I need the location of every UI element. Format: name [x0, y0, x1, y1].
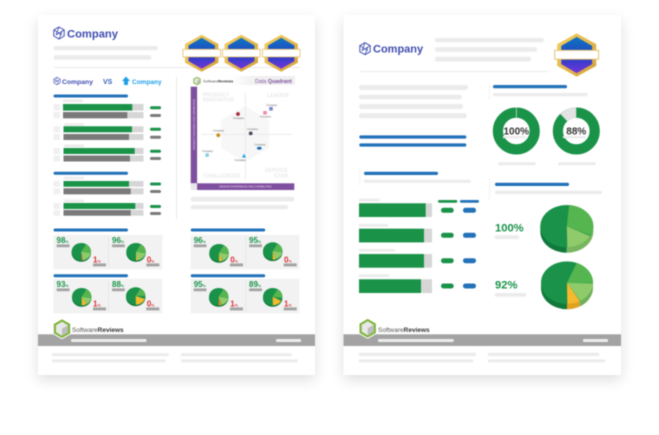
quadrant vendor points: Company [233, 116, 245, 120]
quadrant labels: PRODUCT [203, 92, 230, 98]
quadrant labels: STAR [274, 174, 288, 180]
quadrant vendor points: Company [234, 158, 246, 162]
card 98%: 98% [56, 236, 69, 245]
quadrant vendor points: Company [254, 142, 266, 146]
card 95% [249, 236, 297, 266]
section heading: pies [489, 178, 602, 200]
right footer lines [359, 353, 605, 362]
card 88%: 0% [147, 299, 155, 308]
versus heading: VS [103, 79, 113, 86]
blue link lines [359, 135, 466, 147]
pie chart 92% [541, 261, 593, 309]
quadrant vendor points: Company [260, 114, 272, 118]
header text lines [360, 38, 548, 72]
left footer band [38, 334, 315, 346]
card 98%: 1% [93, 255, 101, 264]
card 96%: 96% [112, 236, 125, 245]
card 95%: 0% [284, 255, 292, 264]
pie chart 100% [540, 205, 593, 253]
versus heading [54, 76, 162, 86]
card 95%: 95% [249, 236, 262, 245]
quadrant labels [203, 92, 289, 180]
card 98% [56, 236, 106, 266]
quadrant labels: LEADER [267, 93, 289, 99]
intro text lines [359, 85, 468, 118]
SoftwareReviews logo left [53, 319, 124, 339]
quadrant vendor points: Company [202, 149, 214, 153]
card 89%: 1% [284, 299, 292, 308]
stat 100%: 100% [495, 223, 524, 235]
quadrant axes: PRODUCT FEATURES AND CAPABILITIES [192, 99, 196, 150]
donut chart 88% [550, 105, 602, 165]
quadrant caption lines [191, 197, 294, 209]
donut chart 100% [498, 108, 536, 165]
quadrant vendor points: Company [266, 103, 278, 107]
chart: green progress bars [359, 199, 432, 293]
page shadows [38, 20, 621, 380]
section heading: donuts [489, 84, 588, 100]
award badges [183, 35, 300, 72]
quadrant labels: CHALLENGER [204, 174, 240, 180]
card 95% second: 1% [230, 299, 239, 308]
card 96% second [194, 236, 243, 266]
quadrant vendor points [202, 103, 278, 162]
versus heading: Company [62, 79, 93, 86]
stat 92% [495, 280, 526, 297]
chart: value pills [438, 200, 479, 288]
panel: pie score cards left [54, 228, 162, 313]
card 89% [249, 280, 297, 310]
chart: comparison bars group 1 [54, 94, 161, 162]
panel: pie score cards right [191, 228, 299, 313]
award badge [555, 33, 599, 77]
card 88%: 88% [112, 280, 125, 289]
quadrant axes [191, 87, 294, 190]
chart: comparison bars group 2 [54, 172, 161, 216]
panel: left report page [38, 15, 315, 375]
header: company logo: Company [67, 28, 119, 40]
card 95% second: 95% [194, 280, 207, 289]
card 96% [112, 236, 159, 266]
quadrant labels: SERVICE [265, 168, 288, 174]
card 96% second: 96% [194, 236, 207, 245]
card 93% [56, 280, 106, 310]
header text lines [54, 46, 300, 68]
quadrant labels: INNOVATOR [203, 98, 234, 104]
quadrant vendor points: Company [247, 127, 259, 131]
donut chart 100%: 100% [504, 127, 529, 138]
quadrant axes: VENDOR EXPERIENCE AND CAPABILITIES [219, 185, 272, 189]
right footer band [344, 334, 621, 346]
donut chart 88%: 88% [566, 127, 586, 138]
section heading: bars [359, 169, 471, 186]
card 96% second: 0% [230, 255, 239, 264]
SoftwareReviews logo right: SoftwareReviews [378, 327, 430, 334]
SoftwareReviews logo right [359, 318, 430, 338]
left footer lines [52, 353, 298, 362]
SoftwareReviews logo left: SoftwareReviews [72, 327, 124, 334]
quadrant header: Data Quadrant [255, 79, 292, 85]
quadrant header: SoftwareReviews [203, 79, 233, 83]
quadrant header [190, 76, 295, 86]
panel: right report page [344, 15, 621, 375]
card 96%: 0% [147, 255, 155, 264]
chart: data quadrant [190, 76, 295, 190]
header: company logo: Company [373, 44, 424, 56]
card 95% second [194, 280, 243, 310]
versus heading: Company [132, 79, 162, 86]
card 88% [112, 280, 159, 310]
card 93%: 93% [56, 280, 69, 289]
card 93%: 1% [93, 299, 101, 308]
stat 92%: 92% [495, 280, 517, 292]
quadrant vendor points: Company [213, 128, 225, 132]
card 89%: 89% [249, 280, 262, 289]
